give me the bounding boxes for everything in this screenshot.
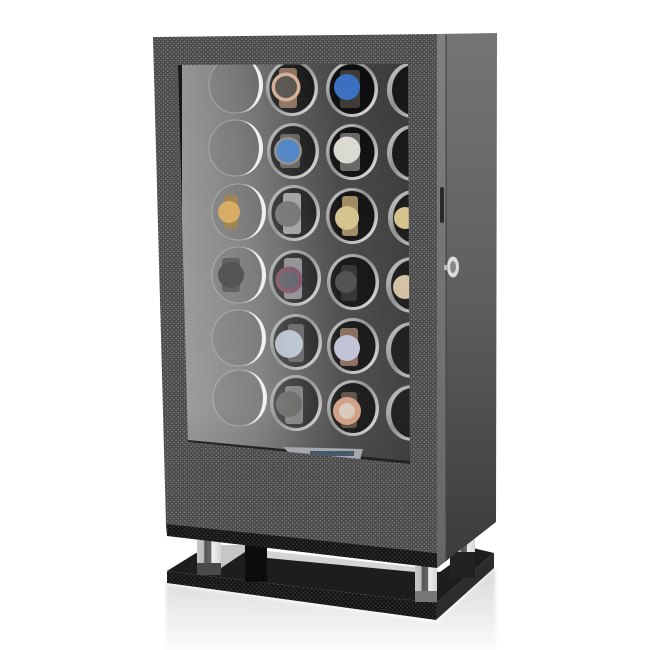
- glass window: [178, 64, 410, 464]
- rear white gap: [245, 540, 473, 572]
- gold watch behind glass: [218, 195, 240, 229]
- left reflection on base: [221, 545, 245, 568]
- frosted glass overlay: [182, 64, 316, 449]
- column 4 winders: [386, 64, 410, 441]
- lower glass haze: [184, 126, 410, 449]
- bright ring arcs: [240, 64, 267, 426]
- rear reflection on base: [267, 551, 415, 572]
- front dark lower band: [166, 524, 437, 568]
- faint ring outlines: [208, 64, 256, 426]
- control display: [283, 447, 363, 460]
- glass interior: [178, 60, 410, 470]
- column 1 winders: [209, 57, 267, 426]
- glass bottom shadow: [188, 440, 410, 464]
- side slot: [440, 187, 444, 223]
- side front strip: [437, 34, 446, 568]
- base right edge: [436, 553, 494, 620]
- column 2 winders: [266, 60, 322, 431]
- cabinet front carbon panel: [153, 34, 437, 553]
- floor shadow: [166, 568, 496, 650]
- glass left shadow: [178, 65, 182, 214]
- base plinth: [167, 540, 494, 620]
- steel watch behind glass: [218, 258, 244, 292]
- column 3 winders: [326, 61, 379, 436]
- cabinet side panel: [437, 33, 497, 568]
- illustration: watch winder cabinet: [153, 33, 497, 640]
- base front edge: [167, 571, 436, 620]
- lock: [444, 256, 459, 278]
- support legs: [197, 535, 475, 602]
- base top surface: [167, 548, 494, 603]
